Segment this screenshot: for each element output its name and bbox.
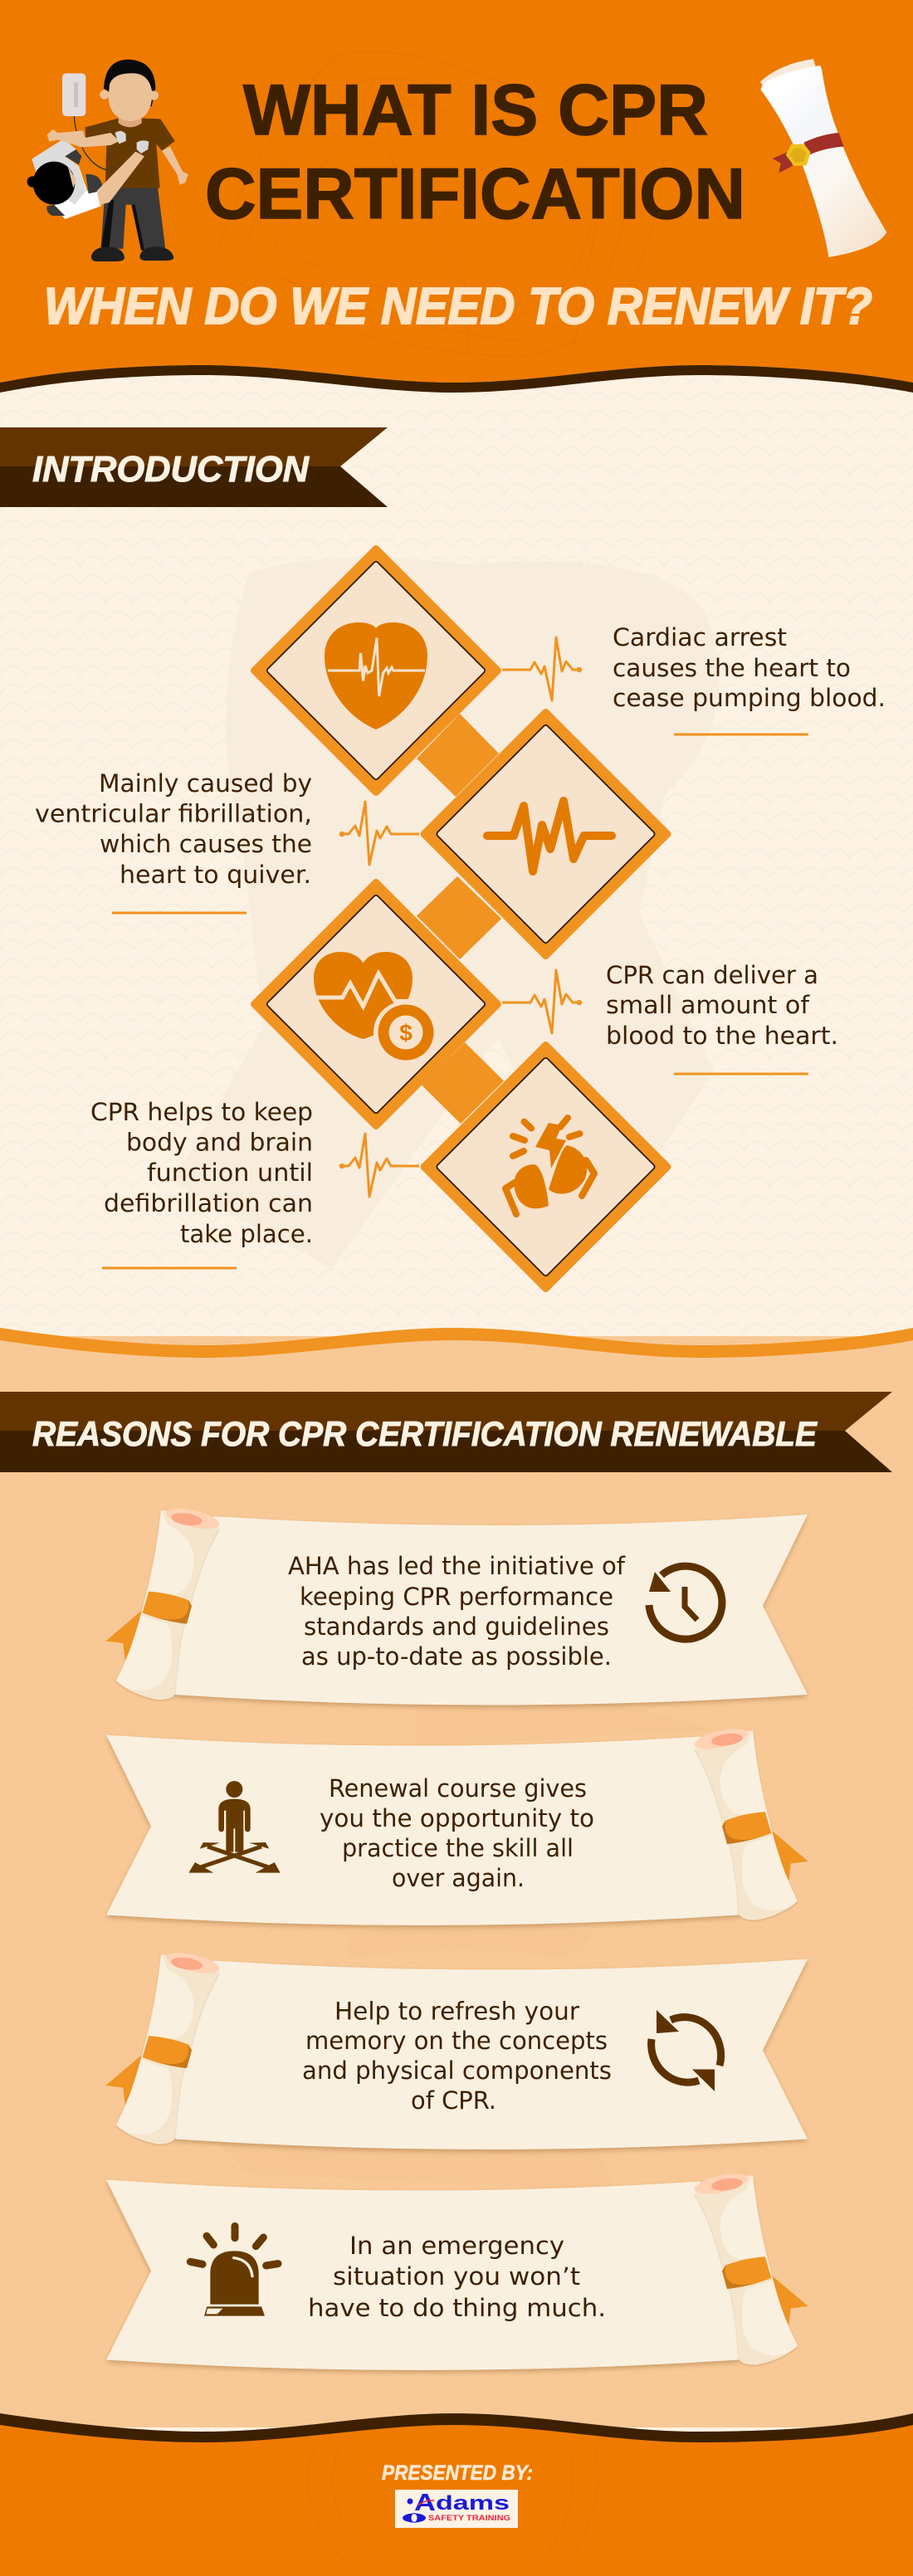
diamond 2: ECG pulse	[423, 712, 667, 956]
logo: Adams Safety Training: SAFETY TRAINING	[428, 2514, 510, 2522]
text block: cardiac arrest: cease pumping blood.	[613, 684, 886, 712]
text: emergency: In an emergency	[349, 2232, 564, 2260]
text block: ventricular fibrillation: heart to quiver.	[120, 861, 311, 889]
section ribbon: reasons	[0, 1392, 892, 1472]
text block: cardiac arrest: Cardiac arrest	[613, 623, 787, 651]
text: AHA guidelines	[288, 1552, 626, 1671]
text: AHA guidelines: AHA has led the initiative of	[288, 1552, 626, 1580]
background: peach section	[0, 1336, 913, 2427]
scroll banner 2	[106, 1725, 808, 1925]
background: faint silhouette in peach section	[216, 1695, 714, 2191]
text: emergency	[308, 2232, 606, 2322]
icon: heart with pulse and dollar coin: $	[399, 1020, 413, 1046]
text: refresh memory: Help to refresh your	[334, 1997, 579, 2025]
scroll banner 3	[105, 1949, 808, 2149]
diamond 4: boxing gloves	[423, 1045, 667, 1289]
title: CERTIFICATION	[205, 154, 745, 234]
background: cream section	[0, 365, 913, 1361]
diamond 1: heart with ECG	[254, 549, 498, 793]
background: faint silhouette behind diamonds	[172, 558, 720, 1268]
text block: body and brain: function until	[147, 1159, 313, 1187]
text block: deliver blood: blood to the heart.	[606, 1022, 838, 1050]
text block: body and brain: body and brain	[126, 1129, 313, 1157]
icon: heart with pulse	[325, 622, 427, 729]
icon: pulse line	[487, 801, 612, 871]
footer wave	[0, 2413, 913, 2442]
icon: heart with pulse and dollar coin	[314, 952, 438, 1064]
icon: gloves and bolt	[505, 1118, 594, 1214]
middle wave	[0, 1328, 913, 1358]
text block: deliver blood: small amount of	[606, 991, 810, 1019]
text block: deliver blood: CPR can deliver a	[606, 961, 818, 989]
presented by label: PRESENTED BY:	[382, 2461, 533, 2485]
text block: body and brain: take place.	[180, 1220, 313, 1248]
section ribbon: introduction	[0, 427, 388, 507]
text: renewal course: practice the skill all	[342, 1834, 574, 1862]
pulse line 4	[339, 1134, 419, 1197]
text block: body and brain	[90, 1098, 313, 1270]
text: AHA guidelines: keeping CPR performance	[300, 1583, 613, 1611]
text block: ventricular fibrillation: ventricular fibrillation,	[35, 800, 312, 828]
header background	[0, 0, 913, 383]
logo: Adams Safety Training: A	[414, 2490, 436, 2516]
section ribbon: introduction: INTRODUCTION	[32, 449, 310, 490]
title: WHAT IS CPR	[243, 71, 708, 150]
illustration: diploma scroll	[760, 59, 886, 257]
connector bars between diamonds	[417, 714, 504, 1124]
icon: refresh arrows	[652, 2010, 721, 2091]
text block: body and brain: defibrillation can	[104, 1189, 313, 1217]
text: emergency: situation you won’t	[333, 2262, 580, 2291]
logo: Adams Safety Training	[395, 2490, 518, 2528]
text: renewal course	[320, 1774, 594, 1892]
text: renewal course: you the opportunity to	[320, 1804, 594, 1832]
text: emergency: have to do thing much.	[308, 2294, 606, 2322]
scroll banner 1	[105, 1505, 808, 1705]
text block: ventricular fibrillation	[35, 769, 312, 915]
text block: body and brain: CPR helps to keep	[90, 1098, 313, 1126]
title	[205, 71, 745, 234]
pulse line 3	[502, 970, 582, 1033]
header wave	[0, 365, 913, 393]
pulse line 2	[339, 802, 419, 865]
text: refresh memory: and physical components	[302, 2056, 612, 2085]
text block: ventricular fibrillation: which causes the	[100, 830, 312, 858]
diamond 3: heart with coin	[254, 882, 498, 1126]
pulse line 1	[502, 637, 582, 700]
scroll banner 4	[106, 2169, 808, 2370]
footer background	[0, 2419, 913, 2576]
text: refresh memory: of CPR.	[411, 2086, 496, 2115]
icon: siren	[190, 2226, 278, 2316]
footer contour texture	[308, 2444, 598, 2569]
illustration: man receiving defibrillation	[27, 60, 188, 261]
header contour texture	[212, 51, 664, 357]
text: renewal course: over again.	[392, 1864, 525, 1892]
subtitle: WHEN DO WE NEED TO RENEW IT?	[44, 278, 872, 335]
text: refresh memory	[302, 1997, 612, 2115]
logo: Adams Safety Training: dams	[436, 2492, 510, 2515]
icon: person at crossroads	[188, 1781, 281, 1873]
text: AHA guidelines: as up-to-date as possible.	[301, 1642, 612, 1671]
text block: cardiac arrest	[613, 623, 886, 735]
section ribbon: reasons: REASONS FOR CPR CERTIFICATION RENEWABLE	[32, 1414, 818, 1453]
text block: ventricular fibrillation: Mainly caused by	[99, 769, 312, 798]
text block: cardiac arrest: causes the heart to	[613, 654, 851, 682]
text: AHA guidelines: standards and guidelines	[304, 1612, 609, 1641]
text: renewal course: Renewal course gives	[329, 1774, 587, 1803]
text: refresh memory: memory on the concepts	[305, 2027, 608, 2055]
text block: deliver blood	[606, 961, 838, 1076]
icon: clock with back arrow	[649, 1566, 722, 1639]
